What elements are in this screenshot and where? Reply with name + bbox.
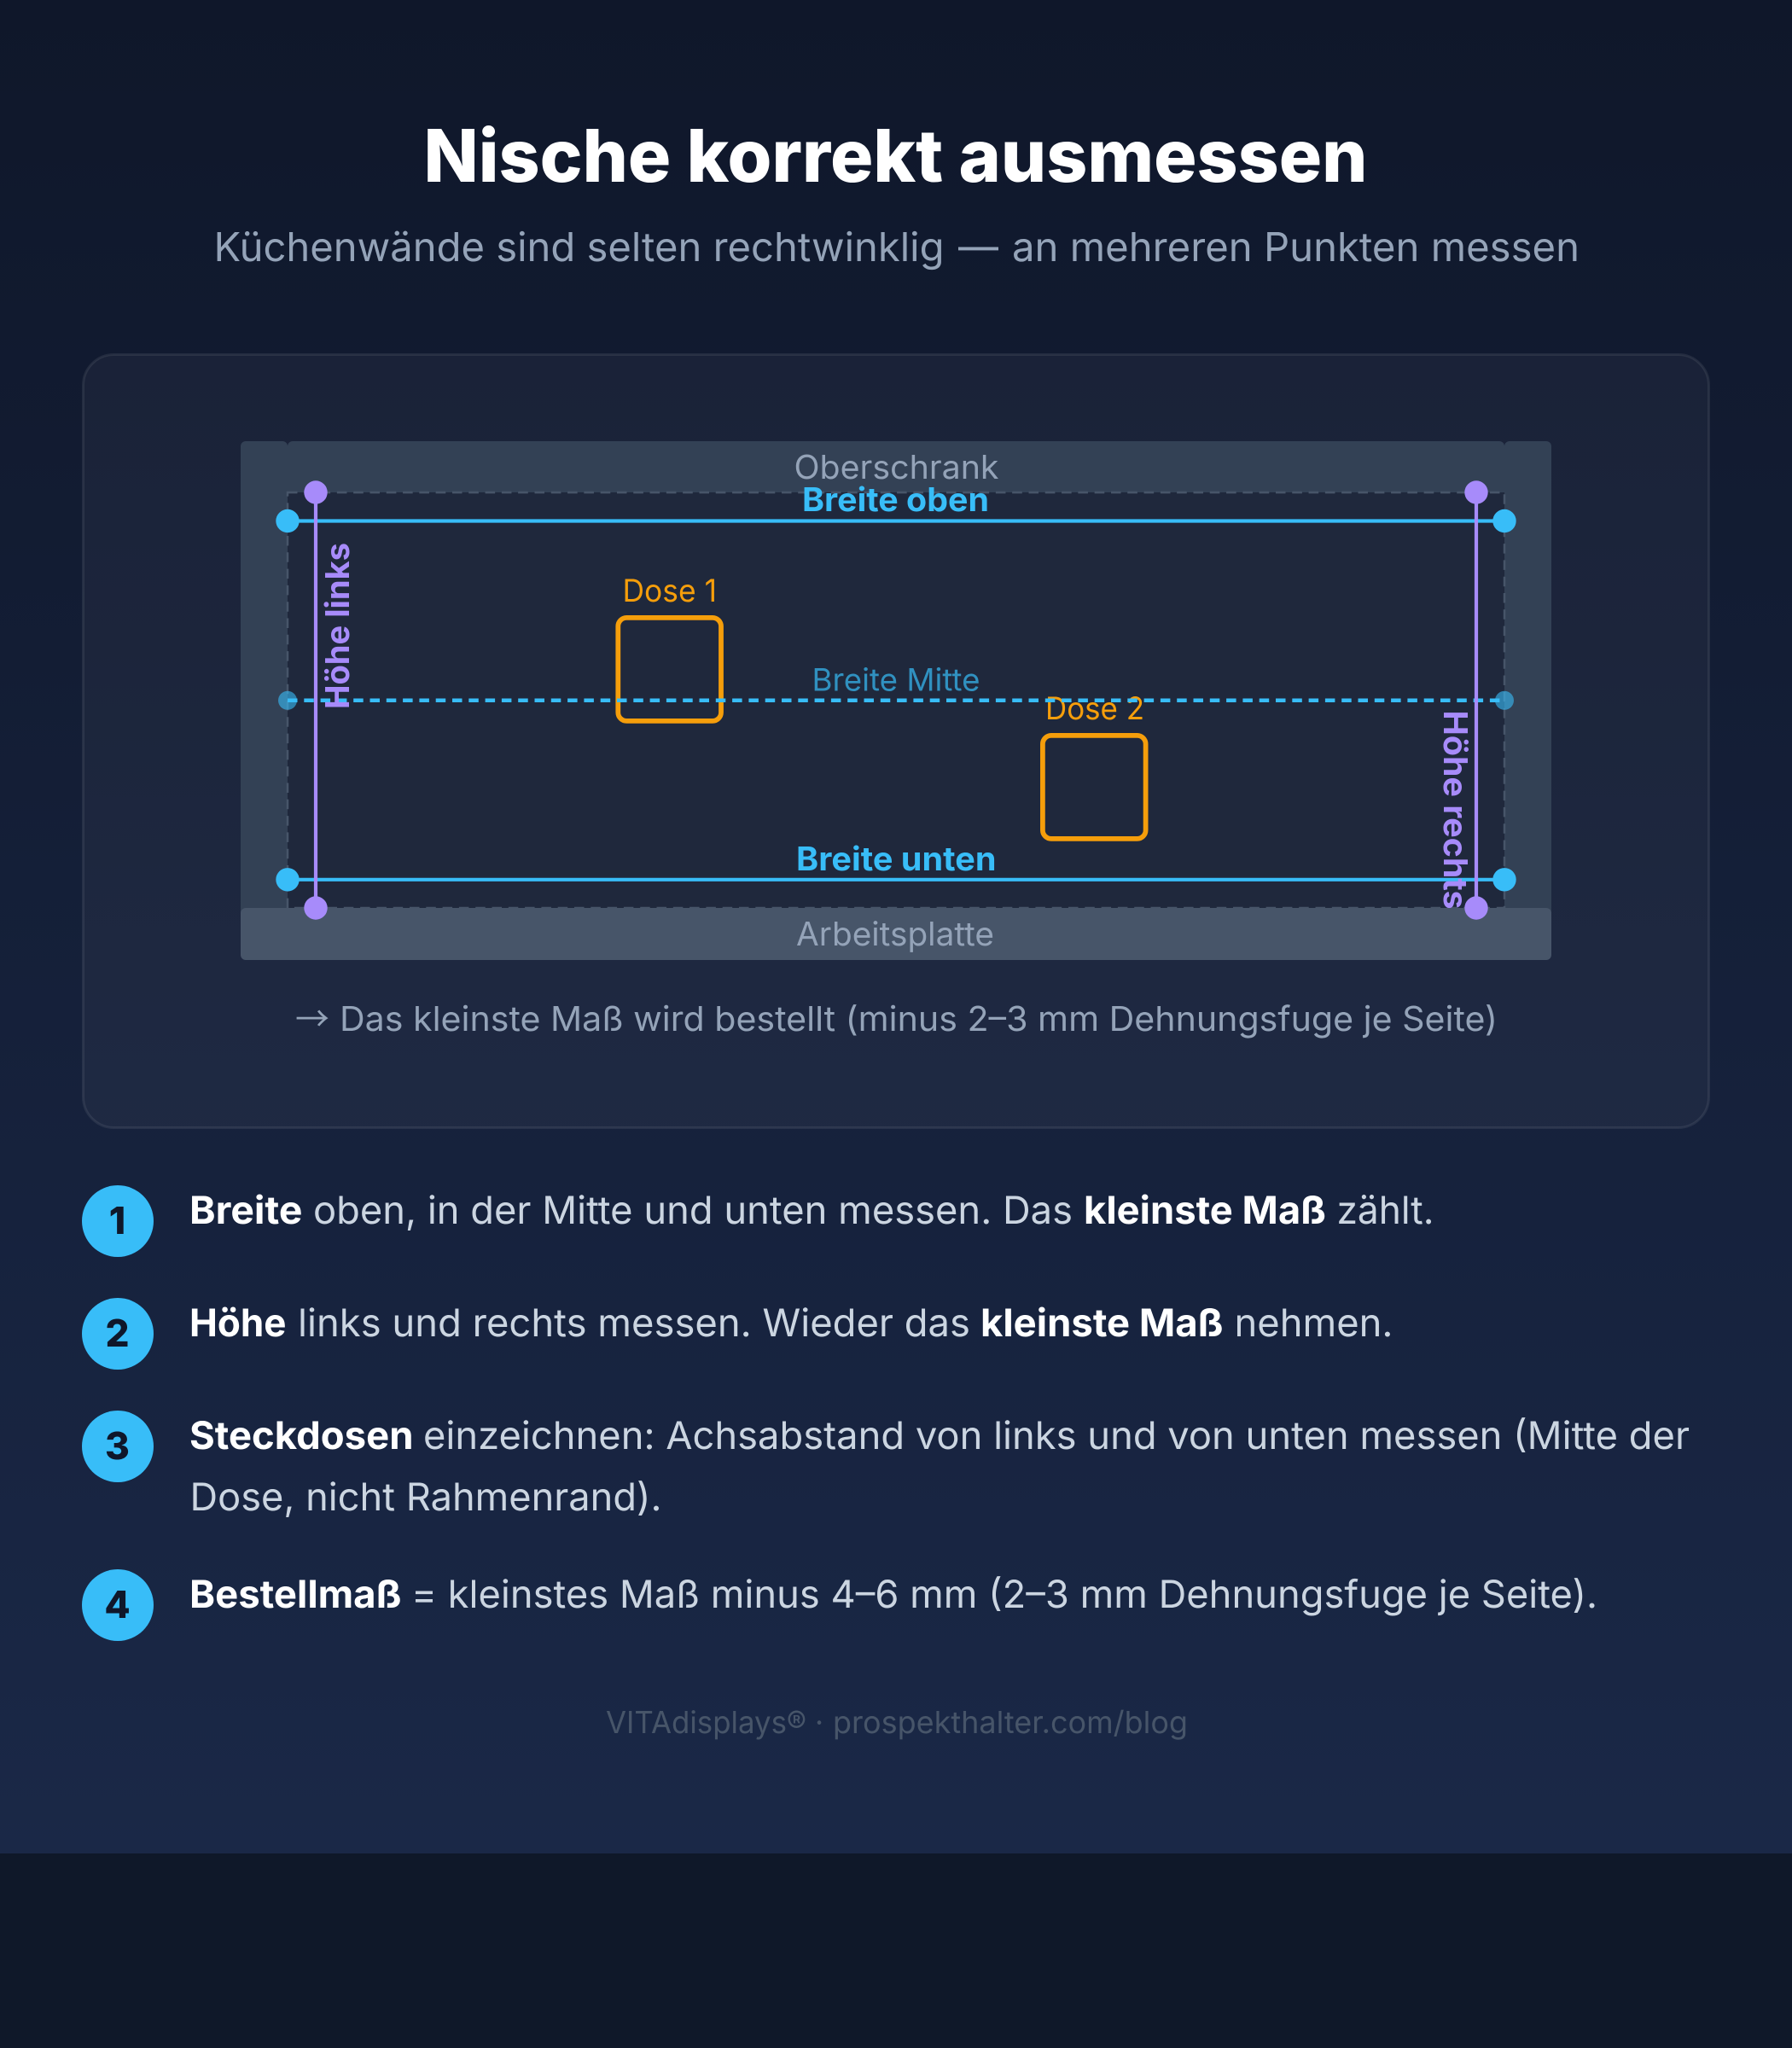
subtitle: — xyxy=(958,223,998,271)
step 3 xyxy=(82,1411,1690,1520)
step 3: Steckdosen xyxy=(189,1411,413,1458)
step 2: Höhe xyxy=(189,1299,287,1346)
step 3: Dose, nicht Rahmenrand). xyxy=(189,1473,662,1520)
label: height right: Höhe rechts xyxy=(1435,710,1475,910)
note: → xyxy=(295,992,329,1041)
width line top xyxy=(276,480,1516,532)
niche area xyxy=(288,492,1504,908)
width line bottom xyxy=(276,840,1516,891)
subtitle: an mehreren Punkten messen xyxy=(1012,223,1580,271)
step 4: Bestellmaß xyxy=(189,1570,401,1617)
step 2 xyxy=(82,1298,1393,1370)
countertop: Arbeitsplatte xyxy=(796,915,994,954)
socket 1: Dose 1 xyxy=(623,572,717,609)
width line top: Breite oben xyxy=(802,480,989,520)
step 1: Breite xyxy=(189,1186,302,1233)
note: Das kleinste Maß wird bestellt (minus 2–3 mm Dehnungsfuge je Seite) xyxy=(340,998,1498,1039)
step 1 xyxy=(82,1185,1434,1257)
step 4: 4 xyxy=(104,1581,131,1627)
countertop xyxy=(241,908,1551,960)
subtitle: Küchenwände sind selten rechtwinklig xyxy=(213,223,944,271)
step 1: kleinste Maß xyxy=(1084,1186,1326,1233)
footer xyxy=(606,1703,1188,1741)
height line right xyxy=(1464,480,1488,920)
height line left: Höhe links xyxy=(318,543,358,709)
step 4 xyxy=(82,1569,1597,1641)
right wall xyxy=(1504,441,1551,919)
step 2: 2 xyxy=(105,1310,130,1356)
left wall xyxy=(241,441,288,919)
step 1: zählt. xyxy=(1336,1186,1434,1233)
height line left xyxy=(304,480,358,920)
socket 2 xyxy=(1043,689,1146,839)
step 3: einzeichnen: Achsabstand von links und von unten messen (Mitte der xyxy=(423,1411,1690,1458)
socket 2: Dose 2 xyxy=(1045,689,1144,727)
title: Nische korrekt ausmessen xyxy=(423,112,1367,200)
step 4: = kleinstes Maß minus 4–6 mm (2–3 mm Dehnungsfuge je Seite). xyxy=(411,1570,1597,1617)
width line middle xyxy=(278,660,1514,710)
socket 1 xyxy=(618,572,721,721)
upper cabinet xyxy=(288,441,1504,492)
width line middle: Breite Mitte xyxy=(812,660,980,698)
footer: prospekthalter.com/blog xyxy=(833,1703,1188,1741)
width line bottom: Breite unten xyxy=(796,840,997,879)
upper cabinet: Oberschrank xyxy=(794,448,998,487)
step 3: 3 xyxy=(105,1423,130,1469)
footer: VITAdisplays® · xyxy=(606,1703,823,1741)
subtitle xyxy=(213,223,1580,271)
panel: niche diagram xyxy=(82,355,1708,1741)
step 2: kleinste Maß xyxy=(980,1299,1224,1346)
step 1: 1 xyxy=(109,1197,125,1243)
step 2: nehmen. xyxy=(1234,1299,1393,1346)
step 1: oben, in der Mitte und unten messen. Das xyxy=(313,1186,1073,1233)
step 2: links und rechts messen. Wieder das xyxy=(298,1299,970,1346)
